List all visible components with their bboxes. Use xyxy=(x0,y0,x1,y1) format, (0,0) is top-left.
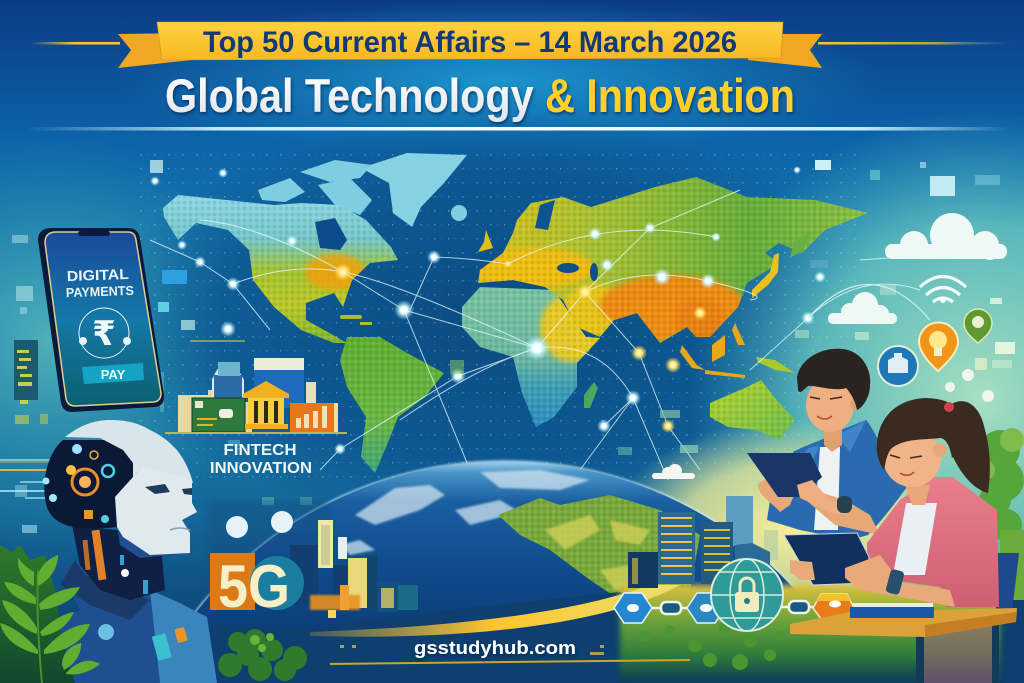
footer url: gsstudyhub.com xyxy=(414,638,576,658)
face xyxy=(883,429,941,487)
ribbon tail left xyxy=(118,33,192,68)
continent: Australia xyxy=(710,380,795,440)
ponytail xyxy=(950,401,990,493)
pay button: PAY xyxy=(101,367,126,382)
icon: large cloud xyxy=(885,213,1007,260)
hair xyxy=(797,349,870,410)
islands: Southeast Asia xyxy=(680,323,745,378)
data streams xyxy=(0,460,72,498)
chair xyxy=(996,553,1019,612)
islands: Japan xyxy=(752,253,779,298)
head circuit xyxy=(44,440,135,528)
icon: globe with padlock xyxy=(711,559,783,631)
inland seas xyxy=(557,263,579,273)
ribbon tail right xyxy=(748,34,822,68)
icon: blue hexagon xyxy=(614,593,652,623)
head back under jaw xyxy=(117,525,190,558)
watch xyxy=(837,496,852,513)
icon: green pin xyxy=(964,309,992,343)
face xyxy=(115,467,197,555)
continent: Africa xyxy=(460,285,605,430)
circuit glow xyxy=(42,444,114,523)
hair xyxy=(877,398,964,470)
background foliage right xyxy=(975,428,1024,600)
label: fintech: FINTECH xyxy=(224,442,296,459)
data squares xyxy=(12,160,1015,533)
continent: Greenland xyxy=(361,153,467,227)
pay button xyxy=(82,363,144,384)
phone body xyxy=(38,228,164,412)
eyes and smile xyxy=(810,397,842,419)
blockchain chain xyxy=(614,559,854,631)
hoodie xyxy=(867,477,999,607)
Caribbean islands xyxy=(340,315,372,325)
ribbon banner xyxy=(118,22,822,68)
right city skyline xyxy=(628,496,778,590)
panel: digital payments phone xyxy=(38,228,164,412)
hair tie xyxy=(944,402,954,412)
label: innovation: INNOVATION xyxy=(210,460,312,477)
icon: bar chart xyxy=(290,403,334,432)
arm and hands xyxy=(758,479,880,535)
under-desk shade xyxy=(924,625,992,683)
icon: tiny cloud xyxy=(652,464,695,479)
notch xyxy=(78,231,110,236)
header rule gold right xyxy=(818,42,1013,44)
continent: North America xyxy=(163,195,398,343)
icon: orange hexagon xyxy=(813,594,854,623)
left city with 5G xyxy=(208,500,418,634)
tablet boy xyxy=(747,453,822,497)
icon: blue hexagon 2 xyxy=(687,593,725,623)
head xyxy=(806,378,854,432)
white rule xyxy=(25,127,1010,130)
islands: UK xyxy=(478,230,493,252)
main title: Global Technology & Innovation xyxy=(165,69,795,122)
arctic islands xyxy=(258,160,467,221)
icon: rupee xyxy=(79,308,131,358)
5G label: 5G xyxy=(218,553,290,620)
neck and tee xyxy=(814,447,840,530)
network dots right xyxy=(945,369,994,402)
icons right xyxy=(652,213,1007,479)
girl xyxy=(784,398,999,607)
desk legs xyxy=(916,625,999,683)
icon: small cloud xyxy=(828,292,897,324)
continent: South America xyxy=(340,337,444,473)
phone screen xyxy=(45,232,161,406)
divider line xyxy=(165,432,347,434)
icon: 5G badge xyxy=(210,553,304,620)
icon: plant xyxy=(0,545,100,683)
desk xyxy=(790,553,1019,683)
watch girl xyxy=(885,569,905,595)
label: digital: DIGITAL xyxy=(67,267,129,285)
books xyxy=(850,603,934,618)
left city buildings xyxy=(208,500,418,634)
antenna balloons xyxy=(226,511,293,538)
white shell xyxy=(65,420,193,483)
clouds xyxy=(340,470,590,555)
banner title: Top 50 Current Affairs – 14 March 2026 xyxy=(203,26,737,59)
icon: card xyxy=(192,398,245,432)
neck xyxy=(72,525,165,600)
face details xyxy=(890,455,922,475)
icon: blue circle figure xyxy=(878,346,918,386)
network lines xyxy=(150,190,1000,480)
tee xyxy=(893,503,937,575)
continent: Eurasia xyxy=(470,170,870,345)
neck xyxy=(905,485,930,505)
connection arc xyxy=(808,284,930,320)
header rule gold left xyxy=(30,42,120,44)
label: payments: PAYMENTS xyxy=(66,283,134,300)
panel: left tower xyxy=(14,340,48,424)
globe land xyxy=(498,495,700,600)
bushes bottom xyxy=(218,622,785,681)
Hudson Bay xyxy=(315,218,347,250)
boy xyxy=(747,349,907,540)
buildings xyxy=(178,358,338,433)
icon: lightbulb pin xyxy=(919,322,958,371)
chain links xyxy=(652,601,815,614)
world map xyxy=(12,153,1015,533)
hands xyxy=(790,555,955,607)
icon: wifi xyxy=(920,276,966,303)
desk top xyxy=(790,608,1017,637)
tablet girl xyxy=(784,533,869,585)
earth globe xyxy=(194,458,794,612)
panel: fintech innovation xyxy=(165,358,347,477)
body xyxy=(40,562,217,683)
icon: rupee: ₹ xyxy=(92,314,116,354)
panel: robot xyxy=(0,420,217,683)
icon: bank xyxy=(243,381,289,429)
islands: Sakhalin and Kamchatka xyxy=(790,232,812,258)
island: New Guinea xyxy=(756,357,795,373)
network nodes xyxy=(150,166,826,455)
shirt xyxy=(767,420,907,540)
ribbon centre xyxy=(157,22,783,60)
ground with road xyxy=(200,585,1024,683)
